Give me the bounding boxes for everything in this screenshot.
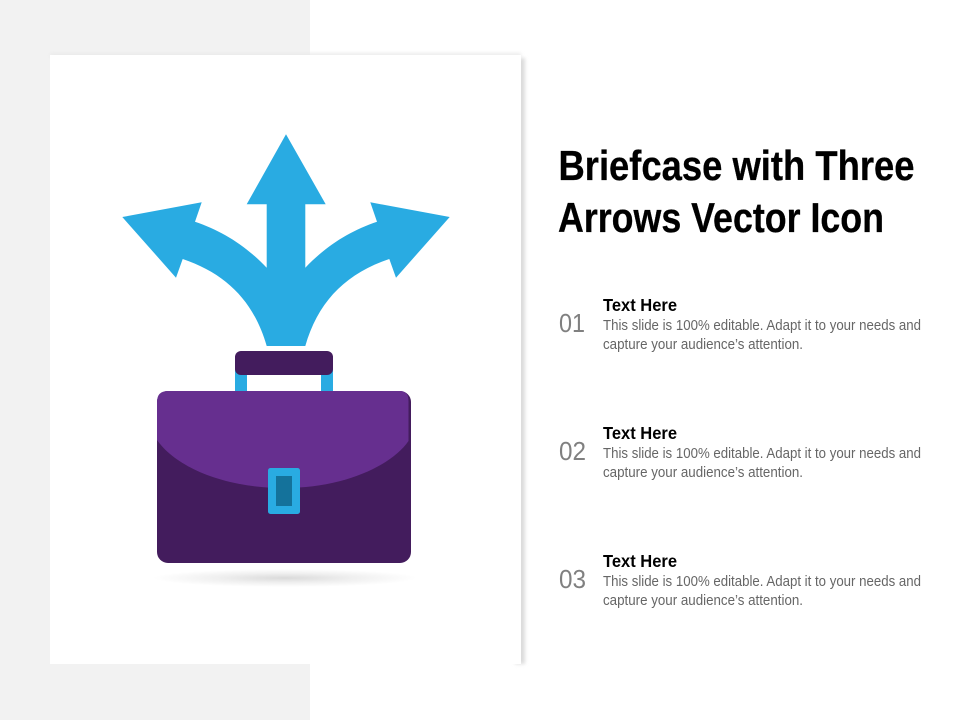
left grey background band	[0, 0, 310, 720]
item description: capture your audience’s attention.	[603, 593, 803, 609]
panel: white icon card	[50, 53, 525, 664]
item description: This slide is 100% editable. Adapt it to your needs and	[603, 446, 921, 462]
handle posts	[235, 365, 333, 392]
item 03	[559, 551, 921, 609]
clasp inner	[276, 476, 292, 506]
ground shadow	[153, 569, 417, 587]
title: Briefcase with Three	[558, 142, 914, 189]
item description	[603, 318, 921, 353]
item 02	[559, 423, 921, 481]
item description	[603, 446, 921, 481]
item heading: Text Here	[603, 295, 677, 315]
title	[558, 142, 914, 241]
handle grip	[235, 351, 333, 375]
case body	[157, 391, 411, 563]
number 01: 01	[559, 308, 585, 338]
icon: briefcase	[153, 351, 417, 587]
clasp	[268, 468, 300, 514]
item description: capture your audience’s attention.	[603, 465, 803, 481]
item description: capture your audience’s attention.	[603, 337, 803, 353]
item description	[603, 574, 921, 609]
item description: This slide is 100% editable. Adapt it to your needs and	[603, 318, 921, 334]
number 03: 03	[559, 564, 586, 594]
icon: three-way arrows	[122, 134, 450, 346]
item description: This slide is 100% editable. Adapt it to your needs and	[603, 574, 921, 590]
number 02: 02	[559, 436, 586, 466]
item heading: Text Here	[603, 423, 677, 443]
item heading: Text Here	[603, 551, 677, 571]
case flap	[157, 391, 408, 488]
title: Arrows Vector Icon	[558, 194, 884, 241]
item 01	[559, 295, 921, 353]
